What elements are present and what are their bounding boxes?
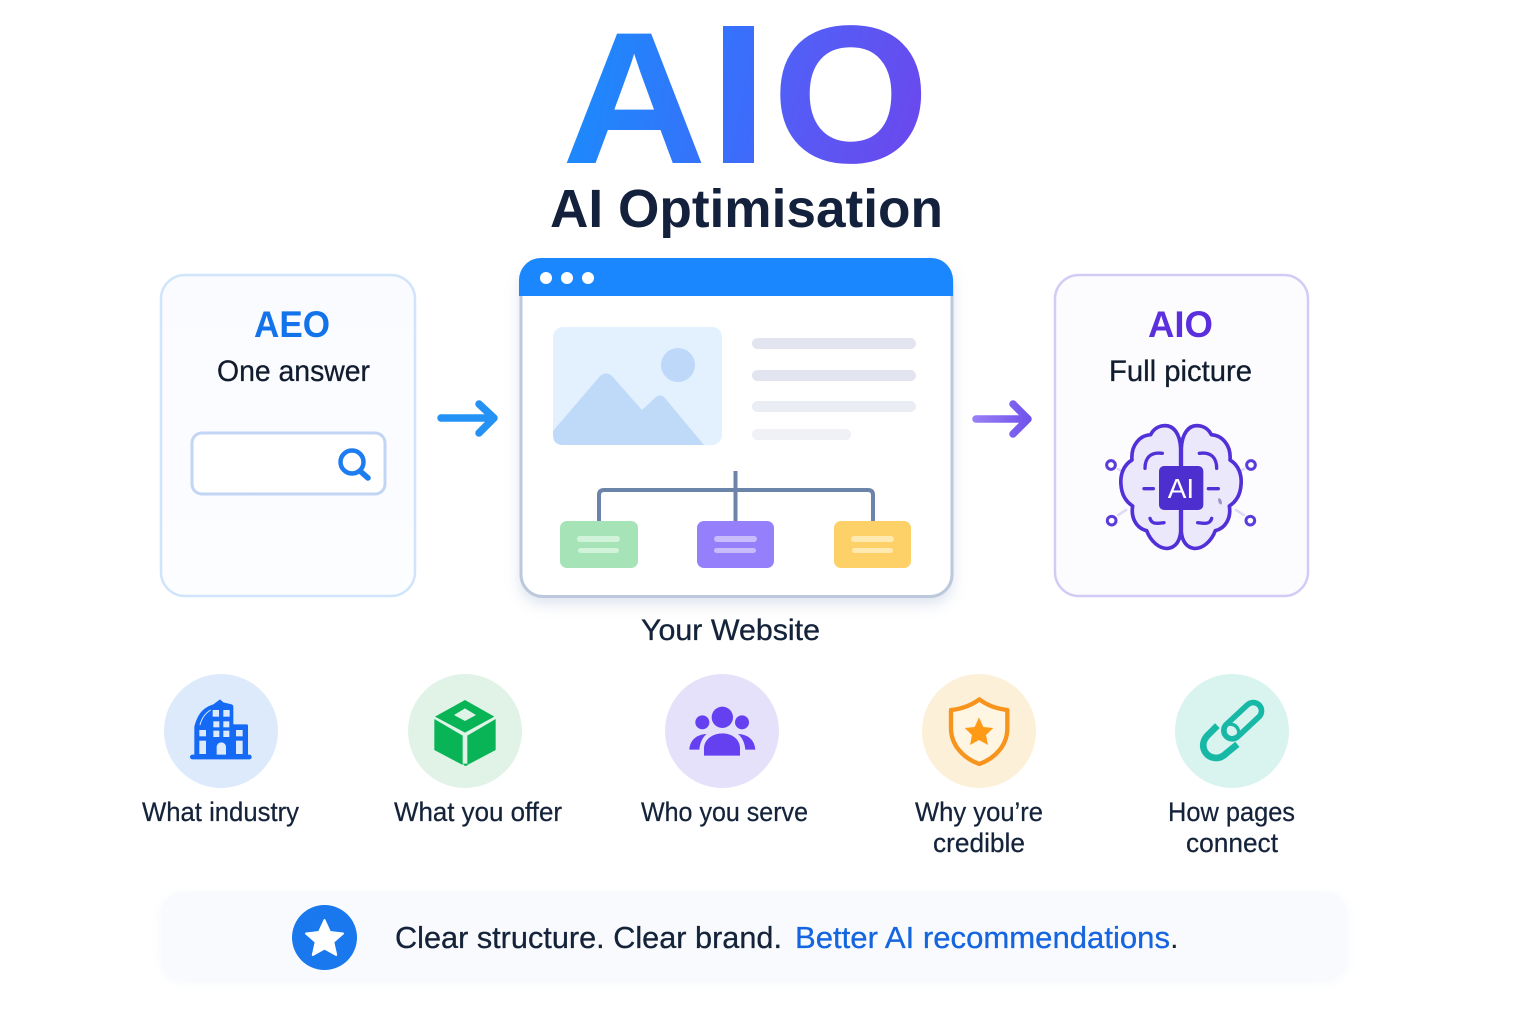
heading: AEO: AEO: [254, 304, 330, 345]
site structure tree: [560, 471, 911, 568]
page node: yellow: [834, 521, 911, 568]
item: How pages connect: [1168, 674, 1295, 858]
page node: purple: [697, 521, 774, 568]
label: What you offer: [394, 797, 562, 827]
search box: [192, 433, 385, 494]
label: Who you serve: [641, 797, 808, 827]
icon: shield with star: [922, 674, 1036, 788]
icon: chain link: [1175, 674, 1289, 788]
label: connect: [1186, 828, 1279, 858]
image placeholder: [553, 327, 722, 445]
callout bar: [161, 892, 1347, 980]
item: What industry: [142, 674, 300, 827]
label: Your Website: Your Website: [641, 614, 820, 647]
label: How pages: [1168, 797, 1295, 827]
icon: AI brain: [1107, 426, 1255, 548]
panel: AIO: [1055, 275, 1308, 596]
text: Full picture: Full picture: [1109, 355, 1252, 388]
arrow: AEO to website: [441, 404, 494, 433]
item: Why you're credible: [915, 674, 1043, 858]
label: credible: [933, 828, 1025, 858]
label: [915, 797, 1043, 858]
page node: green: [560, 521, 638, 568]
callout text: Clear structure. Clear brand.: [395, 920, 782, 955]
icon: people: [665, 674, 779, 788]
label: What industry: [142, 797, 300, 827]
item: Who you serve: [641, 674, 808, 827]
panel: AEO: [161, 275, 415, 596]
subtitle: AI Optimisation: AI Optimisation: [550, 179, 943, 239]
icon: AI brain: AI: [1168, 473, 1194, 504]
callout text: [395, 920, 1179, 955]
browser header: [519, 258, 953, 296]
icon: building: [164, 674, 278, 788]
icon: star badge: [292, 905, 357, 970]
arrow: website to AIO: [976, 404, 1028, 434]
panel: your website browser: [519, 258, 953, 596]
label: Why you’re: [915, 797, 1043, 827]
callout text: .: [1170, 920, 1179, 955]
text lines: [752, 338, 916, 440]
text: One answer: One answer: [217, 355, 370, 388]
icon: box: [408, 674, 522, 788]
title: AIO: [562, 0, 930, 204]
item: What you offer: [394, 674, 562, 827]
heading: AIO: AIO: [1148, 304, 1213, 345]
icon: magnifier: [340, 450, 368, 478]
callout text: Better AI recommendations: [795, 920, 1170, 955]
label: [1168, 797, 1295, 858]
